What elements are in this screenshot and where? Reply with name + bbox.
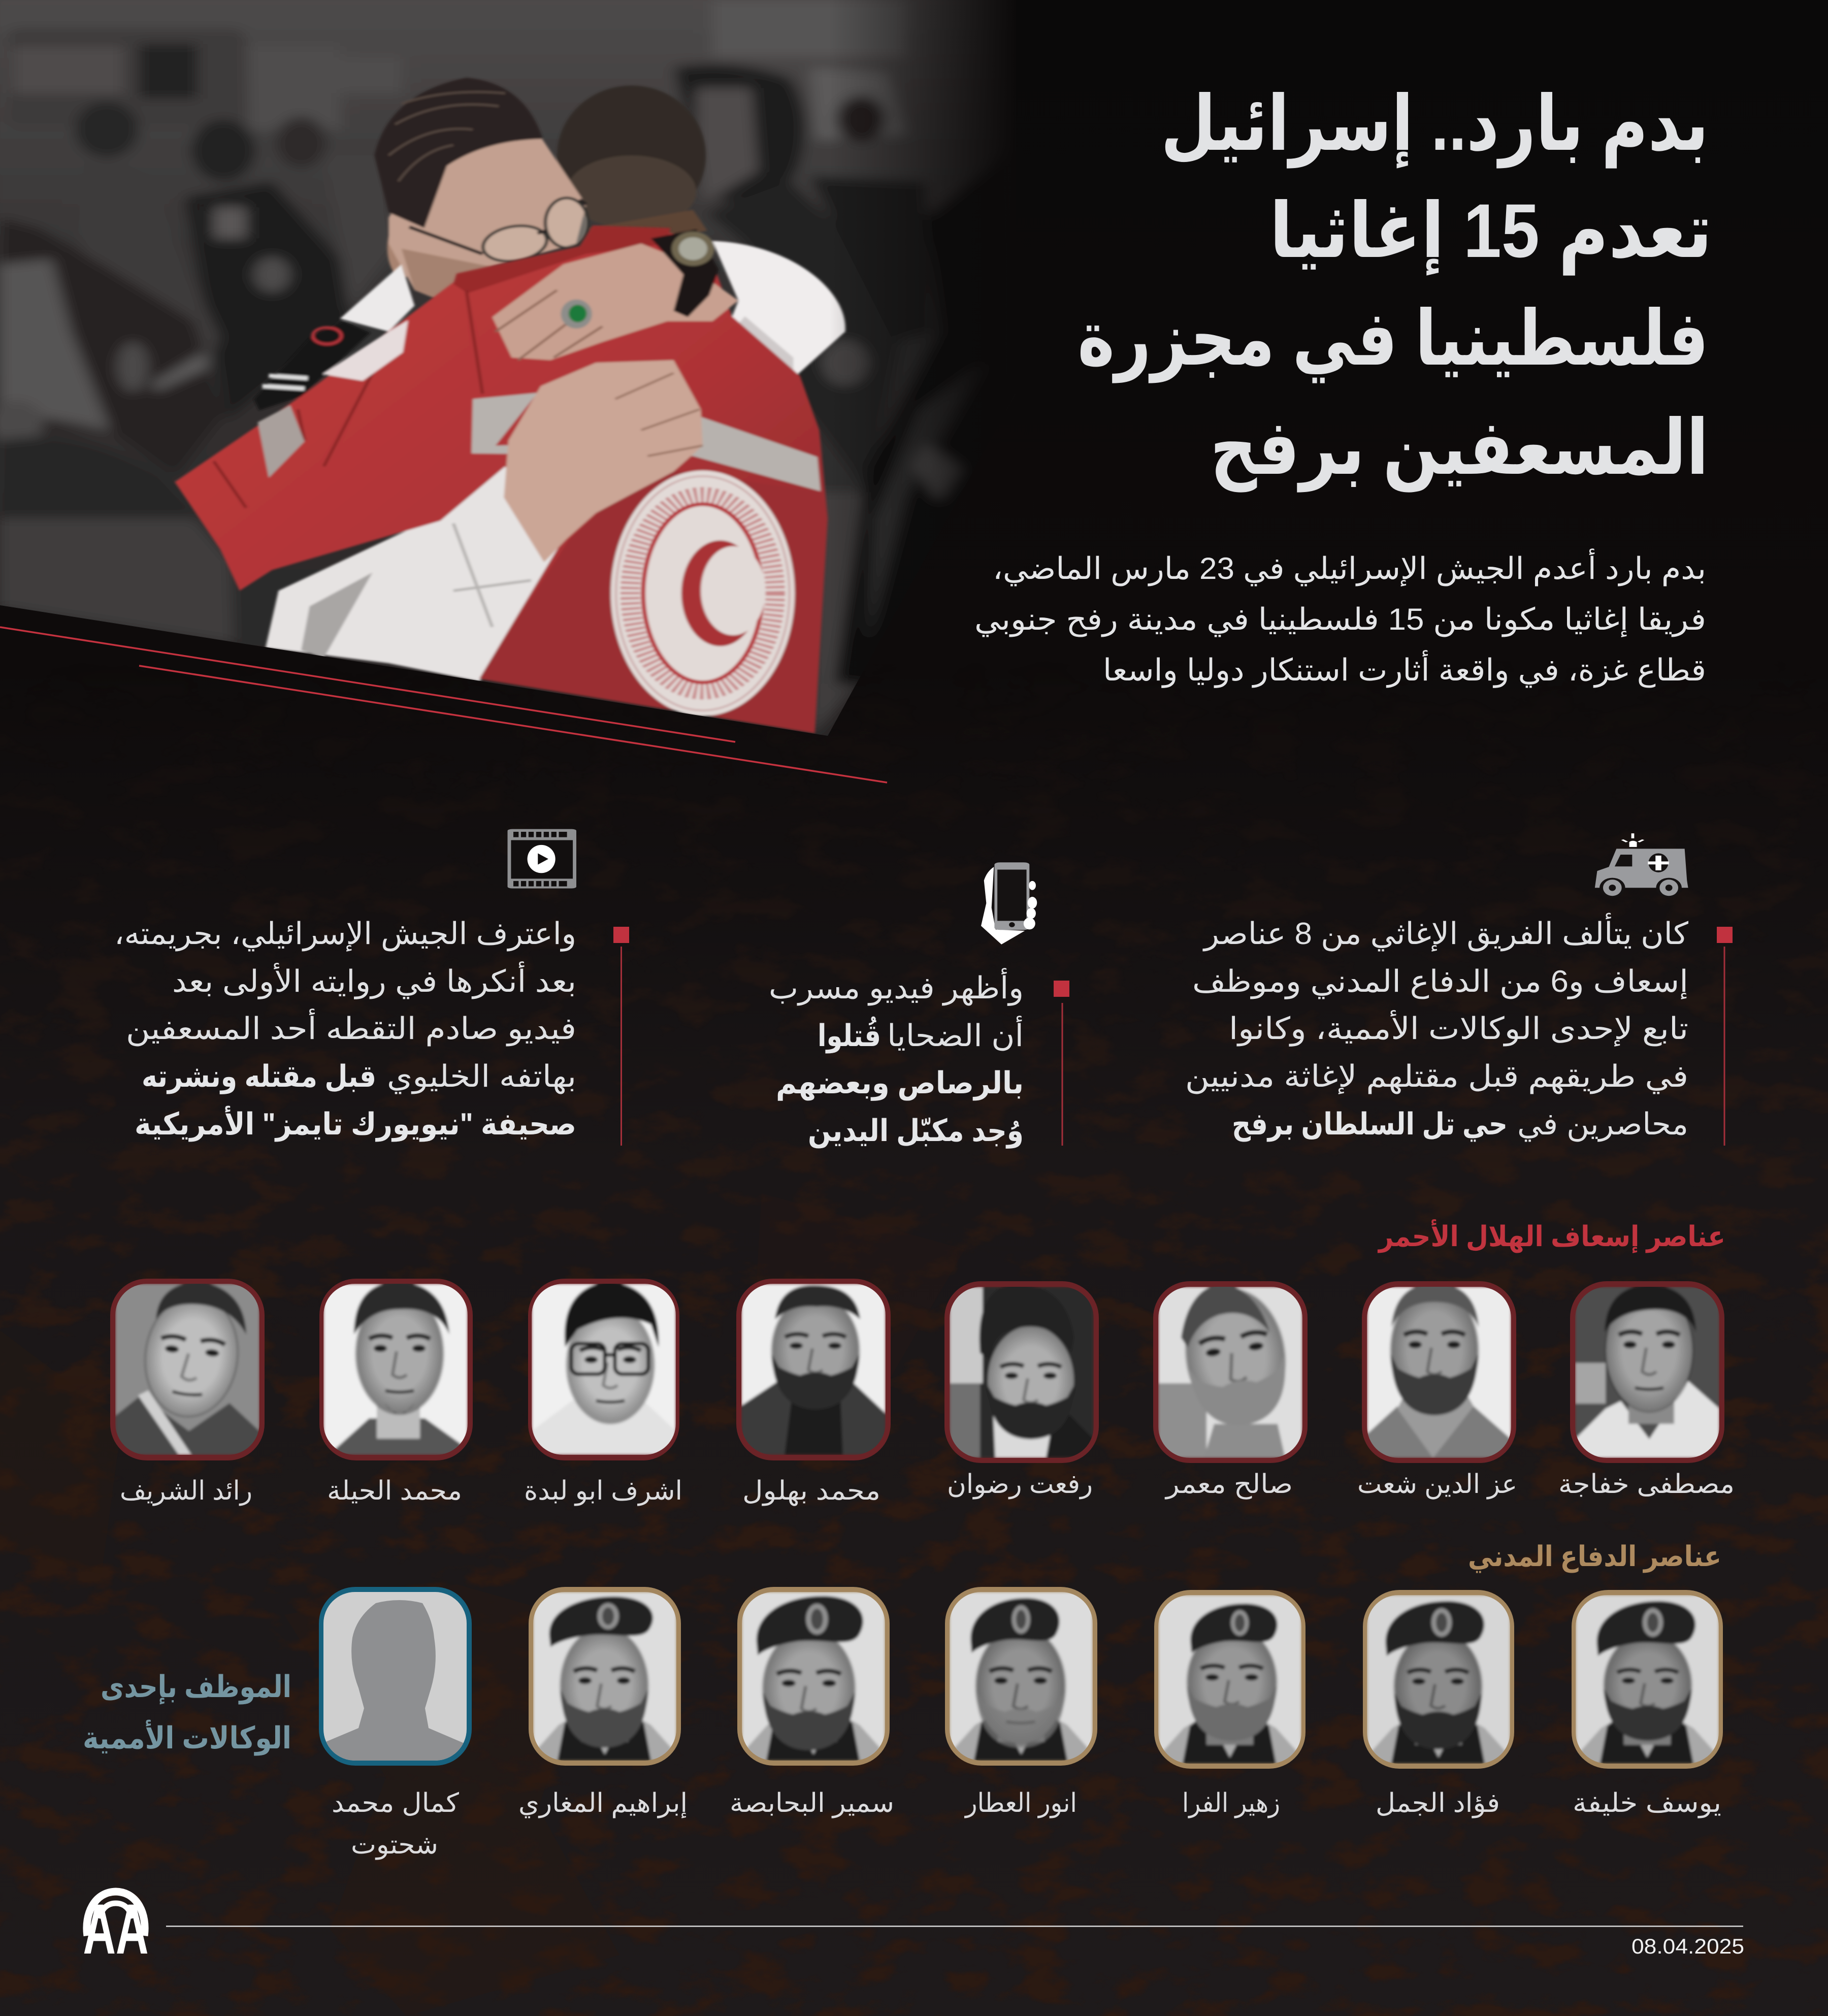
portrait: Mustafa [1570, 1281, 1724, 1463]
column text: قبل مقتله ونشرته [142, 1059, 376, 1094]
portrait: Yousef [1572, 1590, 1723, 1769]
portrait: Ezz [1362, 1281, 1516, 1463]
names: red crescent: صالح معمر [1164, 1470, 1293, 1500]
icon: hand holding phone [981, 862, 1037, 945]
names: civil defense: انور العطار [964, 1789, 1077, 1818]
column text [1185, 913, 1688, 1142]
column text: وُجد مكبّل اليدين [808, 1114, 1024, 1149]
names: red crescent: محمد بهلول [742, 1476, 880, 1506]
column text: قُتلوا [818, 1016, 881, 1054]
portrait: Raed [110, 1279, 265, 1460]
portrait: Anwar [945, 1587, 1097, 1766]
label: UN agency employee [83, 1670, 291, 1756]
column text: كان يتألف الفريق الإغاثي من 8 عناصر [1202, 913, 1688, 952]
column text: حي تل السلطان برفح [1232, 1107, 1508, 1142]
portrait: Fouad [1363, 1590, 1514, 1769]
portrait: Kamal silhouette [319, 1587, 472, 1766]
column: team composition [1185, 913, 1733, 1146]
title: المسعفين برفح [1210, 405, 1709, 493]
names: civil defense: سمير البحابصة [730, 1789, 894, 1818]
names: civil defense: زهير الفرا [1182, 1789, 1280, 1818]
column text: فيديو صادم التقطه أحد المسعفين [126, 1009, 576, 1047]
background [0, 882, 1828, 2016]
names: red crescent: اشرف ابو لبدة [524, 1476, 682, 1506]
portrait: Mohammed Al-Hila [319, 1279, 473, 1460]
column text [769, 968, 1024, 1149]
portrait: Samir [737, 1587, 890, 1766]
title: بدم بارد.. إسرائيل [1161, 81, 1709, 169]
icon: ambulance [1595, 833, 1688, 898]
column text: وأظهر فيديو مسرب [769, 968, 1024, 1006]
column text: أن الضحايا [887, 1016, 1024, 1053]
names: red crescent: رائد الشريف [120, 1476, 252, 1506]
column text: صحيفة "نيويورك تايمز" الأمريكية [135, 1105, 576, 1142]
title: تعدم 15 إغاثيا [1269, 188, 1712, 276]
names: red crescent: مصطفى خفاجة [1558, 1470, 1735, 1499]
portrait: Zuhair [1154, 1590, 1305, 1769]
names: red crescent: عز الدين شعت [1357, 1470, 1517, 1500]
label: UN agency employee: الموظف بإحدى [101, 1670, 291, 1705]
footer rule [166, 1926, 1743, 1927]
column text: في طريقهم قبل مقتلهم لإغاثة مدنيين [1185, 1059, 1688, 1094]
photo: heads [374, 78, 707, 306]
hero photo: two medics embracing [0, 0, 1036, 746]
names: civil defense: فؤاد الجمل [1376, 1789, 1500, 1818]
names: red crescent: محمد الحيلة [327, 1476, 462, 1506]
column text: تابع لإحدى الوكالات الأممية، وكانوا [1229, 1010, 1688, 1047]
marker [1717, 927, 1733, 1146]
portrait: Ashraf [528, 1279, 679, 1460]
portrait: Mohammed Bahloul [736, 1279, 891, 1460]
column text: بالرصاص وبعضهم [776, 1066, 1024, 1101]
heading: red crescent members: عناصر إسعاف الهلال الأحمر [1377, 1219, 1725, 1253]
photo: blurred crowd background [0, 0, 1036, 746]
logo: Anadolu Agency [83, 1889, 148, 1969]
portrait: Rafat [944, 1281, 1099, 1463]
portrait: Saleh [1153, 1281, 1308, 1463]
label: UN agency employee: الوكالات الأممية [83, 1719, 291, 1756]
date: 08.04.2025 [1631, 1934, 1744, 1958]
intro paragraph: قطاع غزة، في واقعة أثارت استنكار دوليا واسعا [1103, 650, 1706, 688]
names: civil defense [332, 1789, 1721, 1860]
portrait row: civil defense [319, 1587, 1723, 1769]
photo: society badge [611, 471, 795, 716]
title: فلسطينيا في مجزرة [1078, 296, 1709, 383]
marker [1054, 981, 1069, 1146]
column text: واعترف الجيش الإسرائيلي، بجريمته، [114, 917, 576, 952]
marker [613, 927, 629, 1146]
column: leaked video [769, 968, 1069, 1149]
names: civil defense: يوسف خليفة [1573, 1789, 1721, 1818]
intro paragraph: بدم بارد أعدم الجيش الإسرائيلي في 23 مارس الماضي، [993, 548, 1706, 587]
column text: بعد أنكرها في روايته الأولى بعد [172, 961, 576, 999]
photo: white shirt sleeve and collar [175, 225, 845, 733]
names: red crescent: رفعت رضوان [947, 1470, 1093, 1500]
column: army admission [114, 917, 629, 1146]
column text: بهاتفه الخليوي [387, 1059, 576, 1094]
photo: red crescent jacket [175, 228, 828, 733]
red accent lines [0, 627, 887, 783]
intro paragraph: فريقا إغاثيا مكونا من 15 فلسطينيا في مدينة رفح جنوبي [974, 602, 1706, 637]
intro paragraph [974, 548, 1706, 688]
names: civil defense: شحتوت [351, 1830, 438, 1860]
photo: hands and watch [492, 244, 738, 360]
icon: film strip with play button [508, 829, 576, 889]
logo: Anadolu Agency: AA [83, 1889, 148, 1969]
title [1078, 81, 1712, 493]
names: civil defense: إبراهيم المغاري [518, 1789, 688, 1818]
portrait: Ibrahim [529, 1587, 681, 1766]
column text: إسعاف و6 من الدفاع المدني وموظف [1192, 964, 1688, 999]
column text [114, 917, 576, 1142]
names: civil defense: كمال محمد [332, 1789, 459, 1818]
column text: محاصرين في [1517, 1107, 1688, 1142]
heading: civil defense members: عناصر الدفاع المدني [1468, 1540, 1721, 1573]
names: red crescent [120, 1470, 1735, 1506]
portrait row: red crescent [110, 1279, 1724, 1463]
